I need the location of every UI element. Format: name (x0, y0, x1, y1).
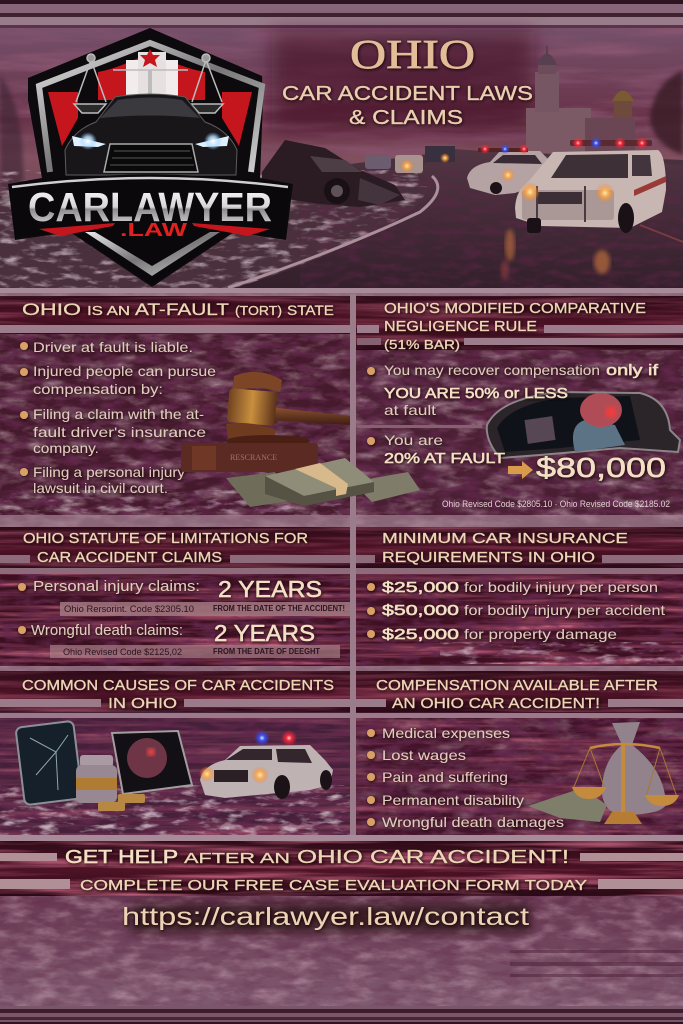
heading: at-fault: IS AN (87, 303, 130, 318)
icon: pills (98, 794, 145, 811)
rescue SUV (515, 137, 666, 233)
heading: causes: COMMON CAUSES OF CAR ACCIDENTS (22, 677, 334, 694)
item: personal injury (18, 576, 345, 614)
ground and snow (0, 150, 683, 288)
heading: negligence rule: OHIO'S MODIFIED COMPARATIVE (384, 300, 646, 317)
amount: $80,000: $80,000 (536, 452, 666, 483)
bullet list: at-fault: compensation by: (33, 381, 163, 397)
icon: money bag (602, 722, 666, 815)
subheading: free case evaluation: COMPLETE OUR FREE CASE EVALUATION FORM TODAY (80, 877, 587, 894)
panel: minimum insurance (356, 527, 683, 666)
icon: balance scales (572, 744, 679, 824)
heading: compensation: AN OHIO CAR ACCIDENT! (392, 695, 600, 712)
icon: cash pile (528, 788, 607, 822)
heading: compensation: COMPENSATION AVAILABLE AFTER (376, 677, 658, 694)
bullet list: negligence: YOU ARE 50% or LESS (384, 385, 568, 402)
heading: statute: CAR ACCIDENT CLAIMS (37, 549, 222, 566)
flag emblem (98, 49, 205, 100)
top decorative stripes (0, 0, 683, 28)
header bottom rule (0, 288, 683, 293)
item: wrongful death: 2 YEARS (214, 620, 315, 646)
title (282, 31, 533, 129)
bullet list: at-fault: company. (33, 440, 99, 456)
bullet list: negligence: 20% AT FAULT (384, 450, 505, 467)
icon: gavel and law book: RESCRANCE (230, 453, 277, 462)
list: insurance minimums: for bodily injury per person (464, 579, 658, 595)
list: compensation: Lost wages (382, 747, 466, 763)
road reflections (501, 229, 610, 280)
distant vehicles (365, 146, 455, 173)
bullet list: at-fault: lawsuit in civil court. (33, 480, 168, 496)
item: wrongful death: Wrongful death claims: (31, 622, 183, 639)
panel: call to action footer (0, 835, 683, 1007)
bullet list: negligence: only if (606, 362, 659, 379)
logo red swooshes (39, 223, 270, 236)
heading: causes: IN OHIO (108, 695, 177, 712)
item: wrongful death: FROM THE DATE OF DEEGHT (213, 647, 320, 656)
panel: at-fault state (0, 296, 350, 515)
road (235, 148, 683, 288)
icon: police car (199, 730, 333, 799)
list: insurance minimums: $25,000 (382, 579, 459, 596)
heading: insurance (382, 530, 628, 566)
icon: brain scan monitor (112, 731, 192, 794)
list: compensation (367, 725, 564, 830)
bullet list: at-fault: Filing a personal injury (33, 464, 185, 480)
subtitle: CAR ACCIDENT LAWS (282, 83, 533, 105)
heading: get help: OHIO CAR ACCIDENT! (297, 847, 569, 867)
police car (467, 144, 552, 195)
icon: damaged car with brain (487, 392, 680, 458)
scales of justice (74, 54, 223, 113)
code strips (60, 602, 350, 616)
list: compensation: Permanent disability (382, 792, 524, 808)
panel: common causes (0, 671, 350, 835)
icon: gavel and law book (181, 372, 350, 472)
title: & CLAIMS (349, 107, 463, 129)
courthouse (526, 46, 635, 154)
bullet list: at-fault (20, 339, 216, 496)
bullet list: at-fault: fault driver's insurance (33, 424, 206, 440)
arrow (508, 461, 533, 479)
heading: negligence rule: (51% BAR) (384, 337, 460, 352)
heading: compensation (376, 677, 658, 712)
bullet list: negligence: You may recover compensation (384, 362, 600, 378)
heading: negligence rule (384, 300, 646, 352)
road edge line (228, 176, 438, 288)
icon: cash stacks (226, 458, 420, 507)
icon: cracked phone (15, 721, 83, 805)
list: compensation: Medical expenses (382, 725, 510, 741)
red side panels (48, 92, 78, 146)
heading: insurance: REQUIREMENTS IN OHIO (382, 549, 595, 566)
list: insurance minimums: $25,000 (382, 626, 459, 643)
vertical divider (350, 294, 356, 838)
heading: at-fault: STATE (287, 302, 334, 318)
wrecked car (262, 140, 405, 207)
list: insurance minimums: for property damage (464, 626, 617, 642)
shield silver frame (39, 43, 262, 172)
heading: at-fault: AT-FAULT (135, 300, 229, 319)
heading: statute: OHIO STATUTE OF LIMITATIONS FOR (23, 530, 308, 547)
left trees (0, 75, 24, 205)
panel: statute of limitations (0, 527, 350, 666)
heading: at-fault (22, 300, 334, 319)
heading: at-fault: (TORT) (235, 303, 282, 318)
title backdrop band (272, 32, 534, 130)
heading: get help: GET HELP (65, 847, 178, 867)
bullet list: negligence: You are (384, 432, 443, 448)
heading: at-fault: OHIO (22, 300, 81, 319)
logo .law: .LAW (120, 220, 187, 240)
header panel: winter crash scene (0, 28, 683, 288)
item: personal injury: FROM THE DATE OF THE ACCIDENT! (213, 604, 345, 613)
bullet list: at-fault: Driver at fault is liable. (33, 339, 193, 355)
bullet list: negligence: at fault (384, 402, 436, 418)
item: personal injury: Personal injury claims: (33, 578, 200, 595)
heading: negligence rule: NEGLIGENCE RULE (384, 318, 537, 335)
heading: causes (22, 677, 334, 712)
logo: CarLawyer.Law shield (8, 28, 293, 287)
panel: compensation (356, 671, 683, 835)
heading: get help: AFTER AN (184, 850, 290, 867)
list: insurance minimums: for bodily injury per accident (464, 602, 665, 618)
logo wordmark: CARLAWYER (28, 184, 272, 230)
bullet list: at-fault: Filing a claim with the at- (33, 406, 204, 422)
list: insurance minimums (367, 579, 665, 643)
heading: insurance: MINIMUM CAR INSURANCE (382, 530, 628, 547)
item: wrongful death (18, 620, 320, 657)
list: insurance minimums: $50,000 (382, 602, 459, 619)
list: compensation: Pain and suffering (382, 769, 508, 785)
heading: statute (23, 530, 308, 566)
heading: get help (65, 847, 569, 867)
bullet list: at-fault: Injured people can pursue (33, 363, 216, 379)
right trees (650, 70, 683, 155)
logo banner (9, 174, 290, 284)
panel: comparative negligence (356, 296, 683, 515)
item: personal injury: Ohio Rersorint. Code $2305.10 (64, 604, 194, 614)
list: compensation: Wrongful death damages (382, 814, 564, 830)
contact url: https://carlawyer.law/contact (122, 903, 529, 931)
item: wrongful death: Ohio Revised Code $2125,02 (63, 647, 182, 657)
icon: medicine jar (76, 755, 117, 803)
logo car (65, 94, 237, 175)
item: personal injury: 2 YEARS (218, 576, 322, 602)
citation: Ohio Revised Code $2805.10 · Ohio Revised Code $2185.02 (442, 499, 670, 509)
bottom decorative stripes (0, 950, 683, 1024)
title: Ohio: OHIO (350, 31, 475, 77)
bullet list: negligence (367, 362, 659, 467)
